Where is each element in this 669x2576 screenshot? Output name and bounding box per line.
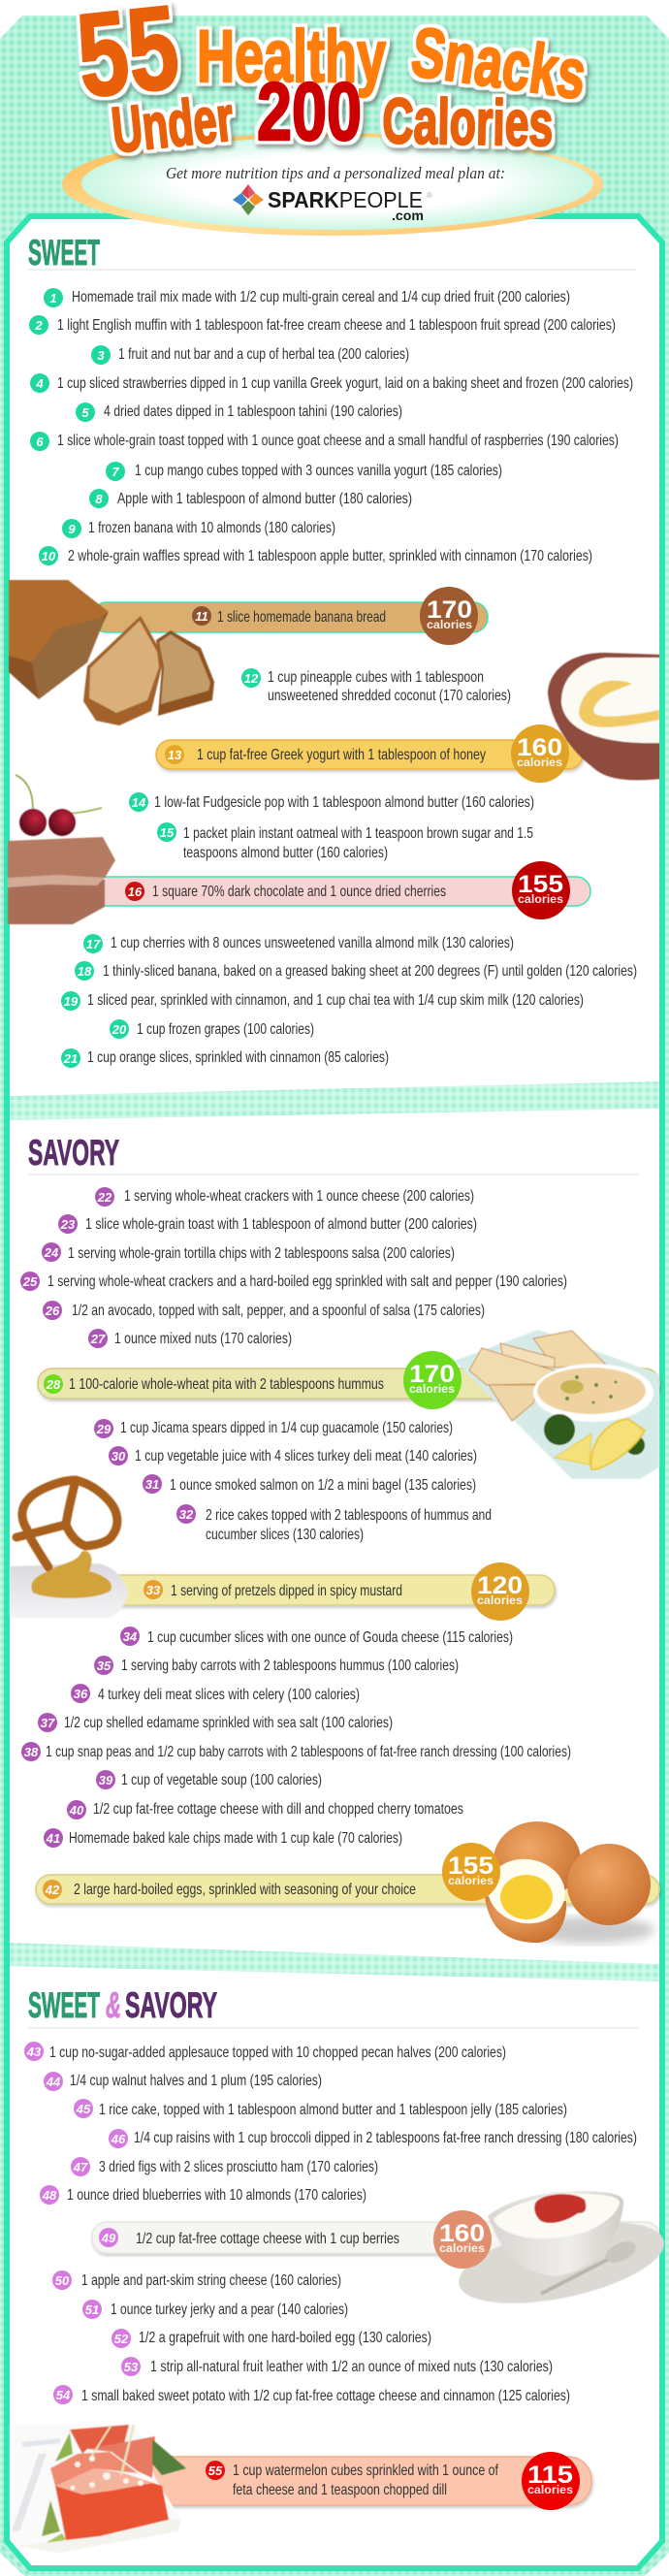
item 29: 29 — [96, 1422, 112, 1436]
item 31 — [143, 1474, 476, 1494]
callout: item 16 dark chocolate — [8, 775, 590, 924]
item 41 — [44, 1828, 402, 1848]
image: pretzel and mustard — [10, 1480, 128, 1618]
logo: SparkPeople — [233, 184, 432, 223]
item 4: 4 — [35, 376, 44, 391]
image: cottage cheese cup — [452, 2191, 669, 2319]
item 44: 44 — [46, 2075, 61, 2089]
item 17: 17 — [86, 937, 101, 951]
badge: 160 calories: 160 — [517, 734, 562, 761]
item 32 — [176, 1504, 492, 1543]
badge: 170 calories: 170 — [409, 1361, 455, 1388]
item 23: 23 — [60, 1217, 76, 1232]
item 12: 1 cup pineapple cubes with 1 tablespoon — [268, 669, 484, 686]
title: Healthy — [197, 16, 386, 98]
item 38: 38 — [24, 1745, 39, 1759]
item 37: 1/2 cup shelled edamame sprinkled with sea salt (100 calories) — [64, 1715, 393, 1731]
badge: 160 calories: 160 — [439, 2220, 485, 2247]
badge: 155 calories — [442, 1843, 500, 1901]
item 53: 1 strip all-natural fruit leather with 1/2 an ounce of mixed nuts (130 calories) — [150, 2359, 553, 2375]
item 26 — [43, 1301, 485, 1320]
callout: item 33 pretzels and mustard: 1 serving of pretzels dipped in spicy mustard — [171, 1583, 402, 1599]
item 44: 1/4 cup walnut halves and 1 plum (195 calories) — [70, 2073, 322, 2089]
item 35: 35 — [97, 1658, 112, 1673]
callout: item 11 banana bread — [9, 580, 488, 725]
item 40 — [67, 1800, 463, 1819]
badge: 155 calories: calories — [518, 892, 563, 906]
item 44 — [44, 2072, 322, 2091]
badge: 160 calories — [511, 724, 569, 783]
tagline: Get more nutrition tips and a personalized meal plan at: — [166, 164, 505, 182]
heading: sweet and savory: & — [106, 1985, 121, 2025]
item 26: 26 — [45, 1304, 60, 1318]
item 20: 20 — [112, 1022, 127, 1037]
item 52: 52 — [114, 2332, 129, 2346]
item 41: 41 — [46, 1831, 60, 1846]
image: watermelon cubes — [10, 2425, 186, 2553]
divider band: sweet to savory — [10, 1081, 659, 1120]
title — [72, 0, 590, 166]
item 39: 1 cup of vegetable soup (100 calories) — [121, 1772, 322, 1788]
item 39: 39 — [99, 1773, 113, 1787]
badge: 155 calories: 155 — [448, 1852, 494, 1880]
badge: 115 calories: 115 — [527, 2462, 573, 2489]
callout: item 16 dark chocolate: 16 — [128, 885, 143, 899]
item 29 — [94, 1419, 453, 1438]
item 35 — [94, 1656, 459, 1675]
item 47: 3 dried figs with 2 slices prosciutto ham (170 calories) — [99, 2159, 378, 2175]
item 51 — [82, 2300, 348, 2319]
item 37: 37 — [41, 1716, 55, 1730]
image: eggs — [483, 1821, 654, 1944]
item 9: 1 frozen banana with 10 almonds (180 calories) — [88, 520, 335, 536]
callout: item 55 watermelon — [10, 2425, 591, 2553]
item 23 — [58, 1214, 477, 1234]
item 24: 24 — [44, 1245, 59, 1260]
badge: 120 calories: calories — [477, 1594, 523, 1607]
item 5: 4 dried dates dipped in 1 tablespoon tahini (190 calories) — [104, 403, 402, 420]
panel: sweet and savory — [10, 1985, 669, 2553]
item 3: 1 fruit and nut bar and a cup of herbal tea (200 calories) — [118, 346, 409, 363]
item 30: 30 — [112, 1449, 126, 1464]
item 22 — [95, 1187, 474, 1207]
item 45: 45 — [76, 2102, 91, 2116]
item 7: 1 cup mango cubes topped with 3 ounces vanilla yogurt (185 calories) — [135, 463, 502, 479]
badge: 170 calories — [403, 1351, 462, 1409]
callout: item 13 greek yogurt — [156, 653, 661, 783]
item 9: 9 — [68, 522, 76, 536]
badge: 170 calories: calories — [409, 1382, 455, 1396]
item 50: 50 — [55, 2273, 70, 2288]
heading: sweet and savory — [28, 1985, 217, 2025]
item 14: 14 — [132, 795, 146, 810]
badge: 120 calories — [471, 1562, 529, 1621]
callout: item 49 cottage cheese: 49 — [101, 2231, 116, 2245]
item 3 — [91, 345, 409, 365]
item 15: 15 — [160, 825, 175, 840]
title: Calories — [382, 84, 554, 159]
item 48 — [40, 2185, 366, 2205]
item 50 — [52, 2270, 341, 2290]
item 40: 1/2 cup fat-free cottage cheese with dill and chopped cherry tomatoes — [93, 1801, 463, 1818]
callout: item 33 pretzels and mustard — [10, 1480, 555, 1621]
item 54: 54 — [56, 2388, 71, 2402]
callout: item 16 dark chocolate: 1 square 70% dark chocolate and 1 ounce dried cherries — [152, 884, 446, 900]
item 52: 1/2 a grapefruit with one hard-boiled egg (130 calories) — [139, 2330, 431, 2346]
callout: item 49 cottage cheese: 1/2 cup fat-free cottage cheese with 1 cup berries — [136, 2231, 399, 2247]
item 15: teaspoons almond butter (160 calories) — [183, 845, 388, 861]
item 12: 12 — [244, 671, 259, 686]
title: Under — [109, 81, 237, 166]
item 15: 1 packet plain instant oatmeal with 1 teaspoon brown sugar and 1.5 — [183, 825, 533, 842]
callout: item 28 pita and hummus — [38, 1330, 659, 1479]
badge: 160 calories: calories — [439, 2241, 485, 2255]
heading: sweet and savory: SWEET — [28, 1985, 100, 2025]
logo: SparkPeople: SPARKPEOPLE — [268, 187, 423, 212]
callout: item 55 watermelon: 55 — [208, 2463, 223, 2478]
item 8 — [89, 489, 412, 508]
item 35: 1 serving baby carrots with 2 tablespoons hummus (100 calories) — [121, 1658, 459, 1674]
callout: item 42 hard-boiled eggs: 2 large hard-boiled eggs, sprinkled with seasoning of your choice — [74, 1882, 416, 1898]
image: chocolate and cherries — [8, 775, 115, 924]
badge: 155 calories: calories — [448, 1874, 494, 1887]
item 24: 1 serving whole-grain tortilla chips with 2 tablespoons salsa (200 calories) — [68, 1245, 455, 1262]
item 2: 2 — [34, 318, 43, 333]
badge: 170 calories — [420, 587, 478, 645]
item 34: 34 — [123, 1629, 138, 1644]
heading: sweet: SWEET — [28, 233, 100, 273]
item 17 — [83, 934, 514, 953]
item 15 — [157, 822, 533, 861]
item 48: 48 — [42, 2188, 57, 2203]
item 43: 43 — [26, 2045, 42, 2059]
item 53: 53 — [124, 2360, 139, 2374]
item 14: 1 low-fat Fudgesicle pop with 1 tablespoon almond butter (160 calories) — [154, 794, 534, 811]
panel: savory — [10, 1133, 659, 1944]
callout: item 42 hard-boiled eggs: 42 — [45, 1883, 60, 1897]
item 32: 2 rice cakes topped with 2 tablespoons of hummus and — [206, 1507, 492, 1524]
item 45 — [74, 2099, 567, 2118]
divider band: savory to sweet and savory — [10, 1943, 659, 1981]
item 21: 21 — [63, 1051, 78, 1066]
item 12 — [241, 668, 511, 704]
item 53 — [121, 2357, 553, 2376]
item 18: 18 — [78, 964, 92, 979]
item 29: 1 cup Jicama spears dipped in 1/4 cup guacamole (150 calories) — [120, 1420, 453, 1436]
item 22: 22 — [97, 1190, 112, 1205]
item 47: 47 — [73, 2160, 88, 2174]
item 27 — [88, 1329, 292, 1348]
item 22: 1 serving whole-wheat crackers with 1 ounce cheese (200 calories) — [124, 1188, 474, 1205]
item 1 — [44, 288, 570, 307]
item 20 — [110, 1019, 314, 1039]
badge: 170 calories: calories — [427, 618, 472, 631]
item 51: 1 ounce turkey jerky and a pear (140 calories) — [111, 2302, 348, 2318]
item 47 — [71, 2157, 378, 2176]
badge: 115 calories: calories — [527, 2483, 573, 2496]
item 9 — [62, 519, 335, 538]
image: pita and hummus plate — [455, 1330, 659, 1479]
item 12: unsweetened shredded coconut (170 calories) — [268, 688, 511, 704]
image: yogurt bowl — [548, 653, 661, 780]
badge: 170 calories: 170 — [427, 596, 472, 624]
item 30: 1 cup vegetable juice with 4 slices turkey deli meat (140 calories) — [135, 1448, 477, 1465]
badge: 155 calories: 155 — [518, 871, 563, 898]
logo: SparkPeople: .com — [392, 208, 424, 223]
badge: 120 calories: 120 — [477, 1572, 523, 1599]
header oval — [62, 133, 603, 236]
callout: item 13 greek yogurt: 1 cup fat-free Greek yogurt with 1 tablespoon of honey — [197, 747, 486, 763]
item 24 — [42, 1242, 455, 1262]
item 51: 51 — [85, 2302, 99, 2317]
item 7 — [106, 462, 502, 481]
item 43 — [24, 2042, 506, 2061]
badge: 115 calories — [522, 2452, 580, 2510]
callout: item 55 watermelon: 1 cup watermelon cubes sprinkled with 1 ounce of — [233, 2463, 498, 2479]
item 7: 7 — [112, 465, 119, 479]
callout: item 42 hard-boiled eggs — [36, 1821, 659, 1944]
title: 200 — [257, 66, 362, 157]
item 43: 1 cup no-sugar-added applesauce topped with 10 chopped pecan halves (200 calories) — [49, 2045, 506, 2061]
callout: item 49 cottage cheese — [92, 2191, 669, 2319]
item 31: 1 ounce smoked salmon on 1/2 a mini bagel (135 calories) — [170, 1477, 476, 1494]
item 36 — [71, 1684, 360, 1703]
badge: 160 calories — [433, 2210, 492, 2269]
item 8: Apple with 1 tablespoon of almond butter (180 calories) — [117, 491, 412, 507]
callout: item 33 pretzels and mustard: 33 — [146, 1583, 161, 1597]
item 54 — [53, 2385, 570, 2404]
item 3: 3 — [97, 348, 105, 363]
item 6: 6 — [36, 435, 44, 449]
item 36: 4 turkey deli meat slices with celery (100 calories) — [98, 1687, 360, 1703]
item 5: 5 — [81, 405, 89, 420]
item 25: 25 — [22, 1274, 38, 1289]
item 19: 19 — [64, 994, 79, 1009]
item 46: 46 — [111, 2132, 126, 2146]
image: banana bread — [9, 580, 214, 725]
item 48: 1 ounce dried blueberries with 10 almonds (170 calories) — [67, 2187, 366, 2204]
item 23: 1 slice whole-grain toast with 1 tablespoon of almond butter (200 calories) — [85, 1216, 477, 1233]
callout: item 28 pita and hummus: 1 100-calorie whole-wheat pita with 2 tablespoons hummus — [69, 1376, 384, 1393]
item 32: cucumber slices (130 calories) — [206, 1527, 364, 1543]
callout: item 11 banana bread: 11 — [195, 609, 208, 624]
item 1: 1 — [49, 291, 57, 306]
item 26: 1/2 an avocado, topped with salt, pepper, and a spoonful of salsa (175 calories) — [72, 1303, 485, 1319]
badge: 155 calories — [512, 861, 570, 919]
item 8: 8 — [95, 492, 103, 506]
item 36: 36 — [74, 1687, 88, 1701]
item 31: 31 — [145, 1477, 159, 1492]
item 20: 1 cup frozen grapes (100 calories) — [137, 1021, 314, 1038]
item 10: 10 — [42, 549, 56, 564]
item 41: Homemade baked kale chips made with 1 cup kale (70 calories) — [69, 1830, 402, 1847]
heading: sweet and savory: SAVORY — [125, 1985, 217, 2025]
item 27: 27 — [90, 1332, 106, 1346]
item 30 — [109, 1446, 477, 1465]
item 27: 1 ounce mixed nuts (170 calories) — [114, 1331, 292, 1347]
heading: savory: SAVORY — [28, 1133, 119, 1173]
item 25 — [20, 1272, 567, 1291]
item 34 — [120, 1626, 513, 1646]
badge: 160 calories: calories — [517, 756, 562, 769]
title: Snacks — [407, 14, 590, 114]
item 50: 1 apple and part-skim string cheese (160 calories) — [81, 2272, 341, 2289]
item 40: 40 — [69, 1803, 84, 1818]
panel: sweet — [8, 233, 661, 1068]
logo: SparkPeople: ® — [427, 191, 432, 200]
item 17: 1 cup cherries with 8 ounces unsweetened vanilla almond milk (130 calories) — [111, 935, 514, 951]
item 21 — [61, 1048, 389, 1068]
item 37 — [38, 1713, 393, 1732]
callout: item 55 watermelon: feta cheese and 1 teaspoon chopped dill — [233, 2482, 447, 2498]
item 14 — [129, 792, 534, 812]
callout: item 13 greek yogurt: 13 — [168, 748, 182, 762]
callout: item 11 banana bread: 1 slice homemade banana bread — [217, 609, 386, 626]
item 39 — [96, 1770, 322, 1789]
item 5 — [76, 402, 402, 422]
item 32: 32 — [179, 1507, 194, 1522]
item 34: 1 cup cucumber slices with one ounce of Gouda cheese (115 calories) — [147, 1629, 513, 1646]
item 21: 1 cup orange slices, sprinkled with cinnamon (85 calories) — [87, 1049, 389, 1066]
callout: item 28 pita and hummus: 28 — [46, 1377, 61, 1392]
item 52 — [112, 2329, 431, 2348]
